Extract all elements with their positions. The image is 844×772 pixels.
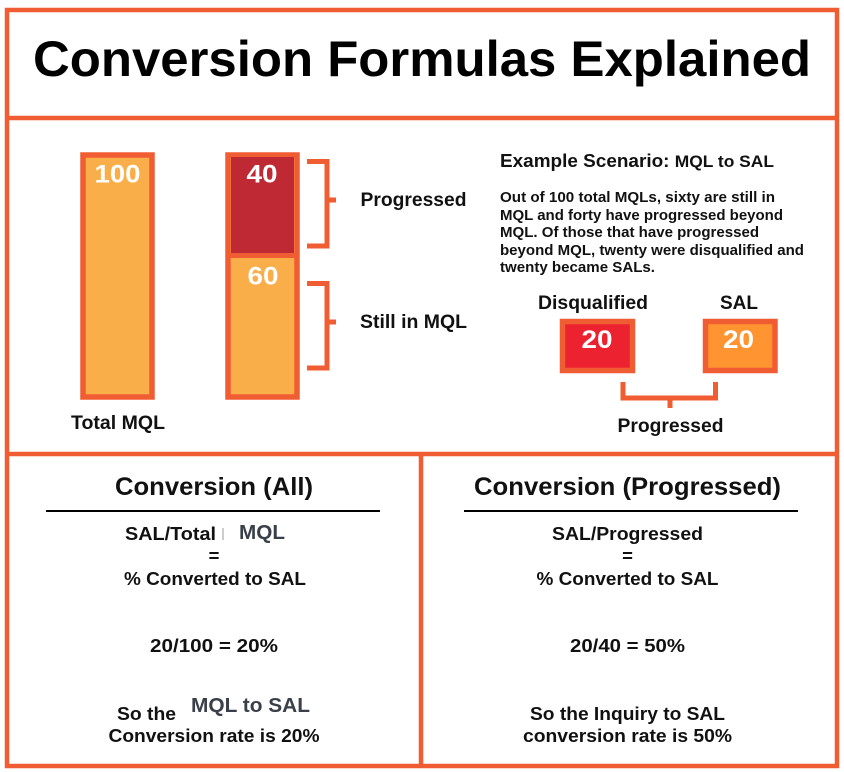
conclusion [523, 703, 732, 746]
bar: total MQL [83, 155, 152, 397]
conclusion: So the [117, 703, 176, 724]
bar: total MQL: 100 [94, 160, 140, 188]
formula: MQL [239, 521, 285, 544]
panel: example scenario [500, 150, 804, 437]
scenario description: beyond MQL, twenty were disqualified and [500, 243, 804, 259]
panel: conversion all [46, 473, 380, 746]
scenario description [500, 190, 804, 276]
box: SAL 20: 20 [723, 326, 754, 354]
label: still in MQL: Still in MQL [360, 311, 467, 333]
conclusion: conversion rate is 50% [523, 725, 732, 746]
formula: % Converted to SAL [536, 568, 718, 589]
scenario description: Out of 100 total MQLs, sixty are still in [500, 190, 775, 206]
bracket: still in MQL [307, 284, 336, 368]
scenario description: twenty became SALs. [500, 260, 655, 276]
panel: bar charts [71, 155, 467, 434]
formula [124, 521, 306, 589]
bar: progressed and still in MQL: 60 [248, 262, 278, 290]
label: progressed: Progressed [360, 189, 466, 211]
formula: SAL/Progressed [552, 523, 703, 544]
formula: = [622, 545, 633, 566]
panel: conversion progressed [464, 473, 798, 746]
bracket: progressed [307, 162, 336, 246]
formula [536, 523, 718, 589]
box: SAL 20 [706, 322, 775, 370]
conclusion: MQL to SAL [191, 694, 310, 717]
box: disqualified 20 [562, 322, 632, 370]
conclusion [108, 694, 320, 746]
box: disqualified 20: 20 [582, 326, 612, 354]
heading rule [46, 510, 380, 512]
conclusion: So the Inquiry to SAL [530, 703, 725, 724]
calculation: 20/100 = 20% [150, 635, 278, 656]
heading: Conversion (Progressed) [474, 473, 781, 501]
conclusion: Conversion rate is 20% [108, 725, 320, 746]
heading rule [464, 510, 798, 512]
heading: Conversion (All) [115, 473, 313, 501]
formula: SAL/Total [125, 523, 216, 544]
scenario description: MQL. Of those that have progressed [500, 225, 759, 241]
bracket: progressed [623, 382, 716, 408]
label: disqualified: Disqualified [538, 292, 648, 314]
title: Conversion Formulas Explained [33, 31, 811, 87]
formula: = [209, 545, 220, 566]
calculation: 20/40 = 50% [570, 635, 685, 656]
label: total MQL: Total MQL [71, 412, 165, 434]
scenario heading: Example Scenario: MQL to SAL [500, 150, 774, 171]
bar: progressed and still in MQL: 40 [246, 160, 278, 188]
label: SAL: SAL [720, 292, 758, 314]
formula: % Converted to SAL [124, 568, 306, 589]
bar: progressed and still in MQL [228, 155, 297, 397]
label: progressed: Progressed [618, 415, 724, 437]
scenario description: MQL and forty have progressed beyond [500, 208, 783, 224]
